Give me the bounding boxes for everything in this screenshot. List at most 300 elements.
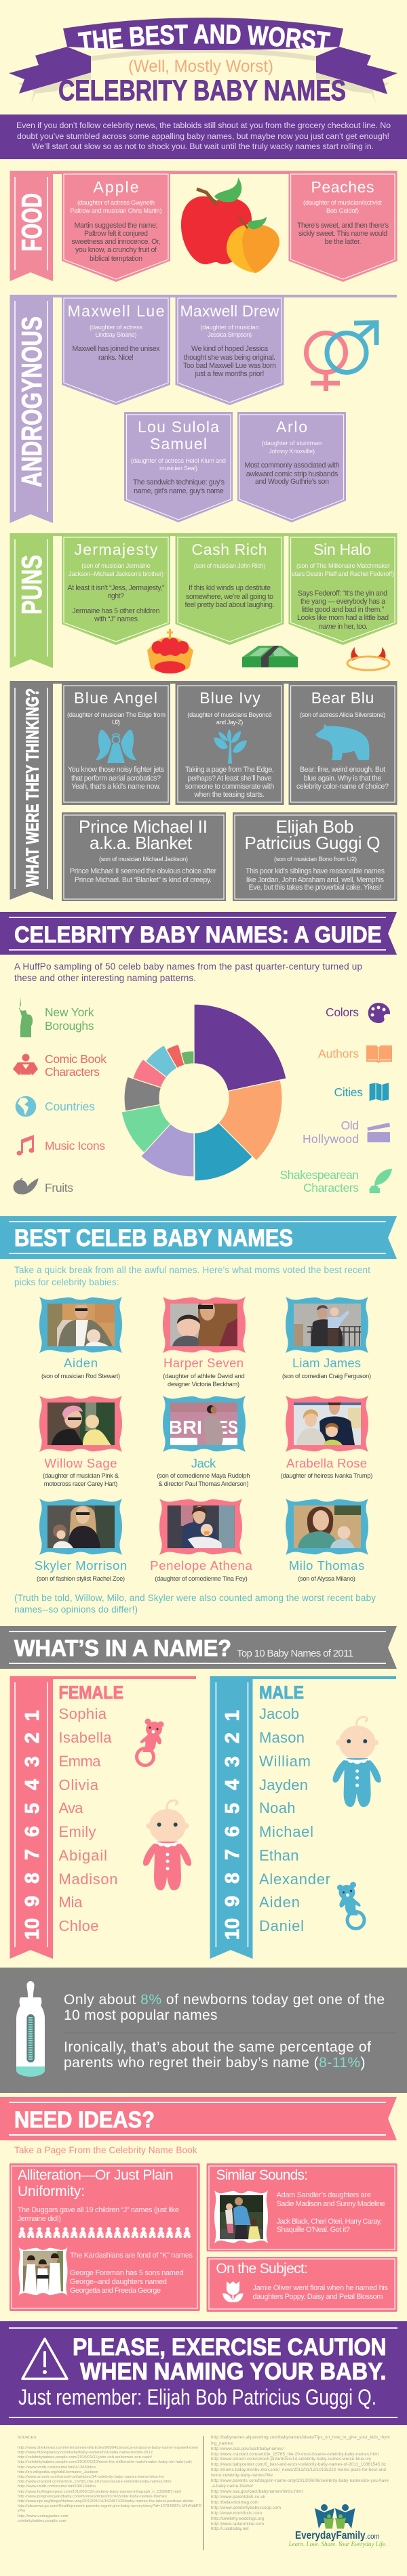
card: Blue Ivy: Blue Ivy (199, 689, 260, 707)
celeb: Skyler Morrison: Skyler Morrison (35, 1558, 127, 1573)
card: Sin Halo: stars Destin Pfaff and Rachel Federoff) (292, 570, 394, 577)
sources right column: http://moms.today.msnbc.msn.com/_news/2012/01/12/10135222-moms-picks-for-best-and- (211, 2468, 387, 2472)
icon: apple and peach (181, 178, 279, 273)
card: Apple: Paltrow felt it conjured (84, 230, 148, 238)
legend: Music Icons: Music Icons (45, 1139, 105, 1152)
list: male names: Daniel (259, 1917, 304, 1934)
top bar (9, 171, 397, 174)
ribbon: food: FOOD (16, 193, 47, 251)
sources right column: http://www.parentdish.co.uk (211, 2495, 266, 2499)
celeb: Arabella Rose: Arabella Rose (286, 1456, 367, 1470)
card: Blue Angel (62, 681, 170, 805)
card: Elijah Bob Patricius Guggi Q: This poor kid’s siblings have reasonable names (246, 867, 385, 875)
banner: celebrity baby names guide (0, 912, 397, 955)
card: Cash Rich: Cash Rich (191, 541, 267, 558)
card: alliteration: The Duggars gave all 19 children “J” names (just like (18, 2206, 179, 2214)
card: Maxwell Drew: Jessica Simpson) (208, 331, 252, 338)
card: Sin Halo: (son of The Millionaire Matchmaker (296, 562, 390, 569)
logo wordmark: EverydayFamily.com (295, 2530, 380, 2541)
card: Bear Blu: Bear Blu (311, 689, 374, 707)
card: Cash Rich: (son of musician John Rich) (194, 562, 265, 569)
card: Blue Angel: Yeah, that’s a kid’s name now. (71, 783, 161, 791)
card: alliteration: Uniformity: (18, 2184, 85, 2199)
card: Cash Rich (175, 533, 284, 645)
icon: tulip (222, 2281, 244, 2302)
icon: gender symbols (307, 323, 376, 391)
legend: Old Hollywood: Old (341, 1119, 359, 1132)
stat: eight percent: Only about 8% of newborns today get one of the (64, 1992, 385, 2008)
card: similar sounds (207, 2163, 398, 2251)
ribbon: puns: PUNS (16, 555, 47, 615)
top bar (210, 1676, 396, 1679)
intro band: Even if you don’t follow celebrity news, the tabloids still shout at you from the grocery checkout line. No (16, 121, 391, 130)
card: Jermajesty: Jermajesty (75, 541, 158, 558)
card: Sin Halo: the yang — everybody has a (301, 598, 385, 606)
ribbon with ranks: 10 (22, 1918, 43, 1940)
list: female names: Abigail (58, 1847, 107, 1864)
icon: blue teddy (337, 1882, 364, 1928)
sources right column: ing_names/ (211, 2441, 233, 2446)
celeb: Penelope Athena: Penelope Athena (150, 1558, 252, 1573)
best names footnote: names--so opinions do differ!) (14, 1604, 138, 1615)
list: female names: Emily (58, 1823, 96, 1840)
sources left column: http://abcnews.go.com/Health/percent-parents-regret-give-baby-survey/story?id=14784897#.UIlhRdbPD (18, 2504, 201, 2508)
list: female names: Mia (58, 1894, 83, 1911)
panel: male names (210, 1676, 396, 1959)
list: male names: Alexander (259, 1871, 330, 1888)
ribbon: food (9, 171, 53, 281)
card: Arlo: Johnny Knoxville) (269, 448, 315, 455)
ribbon with ranks: 9 (22, 1896, 43, 1907)
legend: New York Boroughs: New York (45, 1005, 94, 1019)
ribbon main (63, 18, 343, 50)
card: Lou Sulola Samuel: (daughter of actress Heidi Klum and (131, 457, 226, 464)
legend: Shakespearean Characters (279, 1168, 392, 1194)
card: similar sounds: Adam Sandler’s daughters are (277, 2191, 371, 2199)
card: Elijah Bob Patricius Guggi Q: (son of musician Bono from U2) (274, 856, 357, 863)
card: Blue Ivy: perhaps? At least she’ll have (187, 774, 272, 783)
legend: Old Hollywood (303, 1119, 390, 1146)
logo: EverydayFamily (288, 2504, 387, 2548)
card: Jermajesty: right? (108, 592, 124, 600)
card: Prince Michael II: a.k.a. Blanket (90, 833, 193, 853)
card: Jermajesty (62, 533, 170, 645)
card: Lou Sulola Samuel (124, 412, 233, 522)
ribbon with ranks (210, 1676, 252, 1959)
card: Arlo: Arlo (276, 418, 307, 436)
celeb: Milo Thomas: Milo Thomas (289, 1558, 364, 1573)
card: similar sounds: Sadie Madison and Sunny Madeline (277, 2200, 385, 2208)
celeb: Arabella Rose: (daughter of heiress Ivanka Trump) (281, 1472, 372, 1479)
sources left column: http://www.pregnancyandbaby.com/moms/articles/937665/star-baby-names-themes (18, 2495, 167, 2499)
heading: male: MALE (259, 1682, 304, 1703)
list: female names: Olivia (58, 1777, 99, 1793)
card: Peaches: sickly sweet. This name would (298, 230, 387, 238)
guide intro (14, 961, 362, 983)
icon: ivy plant (214, 729, 247, 764)
sources left column: http://www.sheknows.com/entertainment/articles/969041/jessica-simpsons-baby-name-maxwell-drew (18, 2446, 199, 2450)
banner: best celeb baby names: BEST CELEB BABY NAMES (14, 1225, 293, 1251)
card: Blue Angel: that perform aerial acrobatics? (71, 774, 161, 783)
legend: New York Boroughs: Boroughs (45, 1019, 94, 1033)
ribbon with ranks: 7 (22, 1849, 43, 1860)
card: Elijah Bob Patricius Guggi Q (233, 812, 398, 901)
ribbon with ranks: 9 (222, 1896, 244, 1907)
card: Jermajesty: Jermaine has 5 other children (72, 607, 160, 615)
card: Arlo: and Woody Guthrie’s son (255, 478, 329, 486)
list: female names: Ava (58, 1800, 83, 1816)
banner: need ideas (0, 2097, 397, 2140)
sources left column: http://celebritybabies.people.com/2010/01/20/meet-the-millionaire-matchmaker-baby-sin-halo-judy (18, 2460, 192, 2464)
heading: female: FEMALE (58, 1682, 123, 1703)
best names footnote: (Truth be told, Willow, Milo, and Skyler were also counted among the worst recent baby (14, 1593, 376, 1603)
card: on the subject: On the Subject: (216, 2261, 308, 2277)
card: Bear Blu: blue again. Why is that the (304, 774, 381, 783)
sources right column: http://www.cracked.com/article_15765_the-20-most-bizarre-celebrity-baby-names.html (211, 2452, 379, 2457)
list: female names: Isabella (58, 1729, 112, 1746)
sources right column: http://www.momfinds.com (211, 2511, 262, 2516)
sources right column: http://babynames.allparenting.com/babynames/ideas/Tips_on_how_to_give_your_kids_rhym (211, 2435, 390, 2440)
ribbon with ranks: 1 (22, 1710, 43, 1721)
caution heading: PLEASE, EXERCISE CAUTION (73, 2334, 387, 2361)
legend: Fruits: Fruits (45, 1181, 73, 1194)
legend: Shakespearean Characters: Shakespearean (279, 1168, 359, 1182)
card: Apple: Apple (94, 178, 138, 196)
sources left column: SOURCES: (18, 2436, 37, 2440)
card: Blue Ivy: (daughter of musicians Beyoncé (187, 711, 272, 718)
card: Cash Rich: somewhere, we’re all going to (186, 593, 273, 601)
card: Maxwell Drew (175, 295, 284, 405)
stat: regret: parents who regret their baby’s name (8-11%) (64, 2055, 365, 2071)
legend: Colors: Colors (326, 1005, 359, 1019)
best names intro: Take a quick break from all the awful names. Here’s what moms voted the best recent (14, 1265, 370, 1275)
sources right column: http://www.parents.com/blogs/in-name-only/2012/06/06/celebrity-baby-names/do-you-have (211, 2478, 389, 2483)
sources right column: http://belasnickmag.com (211, 2500, 258, 2505)
panel: caution footer (0, 2321, 407, 2425)
donut chart (121, 1004, 286, 1181)
list: male names: William (259, 1753, 311, 1770)
ribbon: what were they thinking (9, 681, 53, 900)
card: alliteration: Alliteration—Or Just Plain (18, 2167, 174, 2183)
icon: baby boy (333, 1717, 381, 1807)
sources left column: http://en.wikipedia.org/wiki/Jermaine_Jackson (18, 2470, 98, 2474)
card: Prince Michael II: Prince Michael. But “Blanket” is kind of creepy. (75, 876, 212, 884)
ribbon: what were they thinking: WHAT WERE THEY THINKING? (22, 688, 42, 887)
ribbon with ranks: 3 (222, 1756, 244, 1767)
ribbon: puns (9, 533, 53, 668)
celeb: Willow Sage (39, 1396, 122, 1487)
sources divider (203, 2436, 204, 2550)
celeb: Milo Thomas (286, 1499, 368, 1582)
card: Maxwell Lue: Lindsay Sloane) (95, 331, 137, 338)
ribbon with ranks: 6 (22, 1826, 43, 1837)
card: Maxwell Lue: Maxwell has joined the unisex (72, 345, 160, 353)
card: Jermajesty: with “J” names (94, 615, 138, 623)
legend: Comic Book Characters: Characters (45, 1065, 100, 1079)
logo figures (315, 2504, 355, 2529)
sources left column: yPw (18, 2509, 26, 2513)
list: male names: Aiden (259, 1894, 300, 1911)
sources left column: http://www.cracked.com/article_15765_the-20-most-bizarre-celebrity-baby-names.html (18, 2480, 172, 2484)
sources right column: worst-celebrity-baby-names?lite (210, 2473, 273, 2478)
sources left column: http://celebritybabies.people.com/2010/01/11/john-rich-welcomes-son-cash/ (18, 2455, 152, 2459)
legend: Cities: Cities (334, 1085, 363, 1099)
card: Maxwell Drew: Maxwell Drew (180, 302, 279, 320)
sources left column: celebritybabies.people.com (18, 2519, 66, 2523)
card: Sin Halo (289, 533, 398, 645)
top bar (9, 681, 397, 684)
celeb: Liam James: (son of comedian Craig Ferguson) (282, 1373, 371, 1379)
list: male names: Michael (259, 1823, 313, 1840)
best names intro (14, 1265, 370, 1287)
ribbon with ranks: 4 (22, 1779, 43, 1790)
card: alliteration: George Foreman has 5 sons named (70, 2269, 184, 2277)
card: Blue Ivy (175, 681, 284, 805)
sources right column: http://celebrity.weddings.org (211, 2516, 265, 2521)
card: Maxwell Lue: ranks. Nice! (98, 354, 134, 362)
sources left column: http://www.smosh.com/smosh-pit/articles/14-celebrity-baby-names-worse-blue-ivy (18, 2475, 164, 2479)
sources right column: http://www.radaronline.com (211, 2522, 264, 2527)
panel: puns (9, 533, 398, 673)
celeb: Skyler Morrison: (son of fashion stylist Rachel Zoe) (37, 1575, 125, 1582)
ribbon with ranks: 2 (222, 1732, 244, 1743)
icon: angel (96, 730, 136, 763)
celeb: Skyler Morrison (35, 1499, 127, 1582)
card: Prince Michael II: Prince Michael II (79, 816, 208, 837)
card: Peaches: Bob Geldof) (326, 207, 359, 214)
legend: Countries: Countries (45, 1100, 95, 1113)
ribbon shadow (18, 47, 389, 104)
card: Apple: biblical temptation (90, 255, 142, 263)
intro band: We’ll start out slow so as not to shock you. But wait until the truly wacky names start rolling in. (32, 142, 374, 151)
legend: Authors (318, 1045, 392, 1063)
legend: Comic Book Characters: Comic Book (45, 1052, 106, 1066)
celeb: Jack (157, 1396, 250, 1487)
card: Maxwell Drew: just a few months prior! (194, 370, 265, 378)
card: Bear Blu: Bear: fine, weird enough. But (300, 766, 385, 774)
card: Apple: Paltrow and musician Chris Martin) (71, 207, 161, 214)
banner: need ideas: NEED IDEAS? (14, 2107, 155, 2133)
card: Sin Halo: name in her, too. (319, 623, 368, 631)
top bar (9, 295, 397, 297)
card: Arlo (237, 412, 346, 522)
card: Blue Ivy: when the teasing starts. (193, 791, 265, 799)
subtitle: (Well, Mostly Worst) (128, 57, 273, 76)
list: female names: Sophia (58, 1705, 107, 1722)
banner: what's in a name: WHAT’S IN A NAME? (14, 1636, 231, 1661)
icon: pink teddy (137, 1718, 164, 1766)
best names intro: picks for celebrity babies: (14, 1277, 119, 1287)
card: Peaches: be the latter. (324, 238, 361, 246)
card: Maxwell Drew: Too bad Maxwell Lue was born (183, 362, 276, 370)
card: Blue Angel: U2) (112, 719, 120, 726)
celeb: Jack: (son of comedienne Maya Rudolph (157, 1472, 250, 1479)
celeb: Jack: BRI (168, 1417, 202, 1438)
list: male names: Noah (259, 1800, 296, 1816)
title banner (9, 18, 398, 107)
sources left column (18, 2436, 201, 2523)
celeb: Penelope Athena (150, 1499, 252, 1582)
card: Elijah Bob Patricius Guggi Q: Eve, but this takes the proverbial cake. Yikes! (248, 884, 381, 892)
ribbon with ranks: 1 (222, 1710, 244, 1721)
sources right column: http://www.babycenter.com/0_best-and-worst-celebrity-baby-names-of-2011_10361545.bc (211, 2462, 386, 2467)
celeb: Willow Sage: motocross racer Carey Hart) (44, 1480, 117, 1487)
card: Blue Ivy: Taking a page from The Edge, (185, 766, 274, 774)
card: Peaches: (daughter of musician/activist (303, 199, 382, 206)
panel: food (9, 171, 398, 282)
legend: Cities (334, 1083, 389, 1101)
banner: best celeb baby names (0, 1216, 397, 1259)
celeb: Aiden: Aiden (64, 1356, 98, 1370)
caution heading: WHEN NAMING YOUR BABY. (80, 2359, 387, 2385)
panel: female names (9, 1676, 196, 1959)
sources right column (210, 2435, 390, 2531)
ribbon with ranks: 8 (22, 1873, 43, 1884)
stat: eight percent: 10 most popular names (64, 2008, 217, 2023)
card: Apple: you know, a crunchy fruit of (75, 246, 157, 254)
celeb: Harper Seven: Harper Seven (163, 1356, 244, 1370)
card: Blue Ivy: and Jay-Z) (216, 719, 243, 726)
legend: New York Boroughs (19, 997, 94, 1037)
card: Lou Sulola Samuel: Samuel (150, 435, 207, 453)
card: Sin Halo: Sin Halo (313, 541, 371, 558)
panel: androgynous (9, 295, 397, 523)
panel: newborn statistics (0, 1968, 407, 2093)
card: Bear Blu: (son of actress Alicia Silverstone) (300, 711, 385, 718)
card: Maxwell Lue: Maxwell Lue (68, 302, 164, 320)
ribbon with ranks (9, 1676, 53, 1959)
list: male names: Ethan (259, 1847, 298, 1864)
card: similar sounds: Jack Black, Cheri Oteri, Harry Caray, (277, 2218, 382, 2226)
list: male names (259, 1705, 330, 1934)
legend: Shakespearean Characters: Characters (303, 1181, 359, 1194)
top bar (9, 533, 397, 536)
card: Prince Michael II: (son of musician Michael Jackson) (99, 856, 188, 863)
intro band: doubt you’ve stumbled across some appalling baby names, but maybe now you just can’t get enough! (17, 131, 389, 141)
sources right column: http://www.ssa.gov/oact/babynames/limits.html (211, 2489, 303, 2494)
ribbon with ranks: 3 (22, 1756, 43, 1767)
celeb: Harper Seven (163, 1297, 246, 1388)
sources left column: http://www.usmagazine.com (18, 2514, 69, 2518)
banner: what's in a name (0, 1626, 397, 1669)
card: Apple: sweetness and innocence. Or, (72, 238, 160, 246)
card: alliteration (9, 2163, 200, 2311)
legend: Authors: Authors (318, 1047, 359, 1060)
legend: Fruits (14, 1178, 73, 1194)
sources right column: http://www.ssa.gov/oact/babynames/ (211, 2447, 284, 2451)
icon: warning triangle (22, 2339, 67, 2379)
card: Apple: (daughter of actress Gwyneth (77, 199, 155, 206)
list: female names (58, 1705, 118, 1934)
legend: Colors (326, 1003, 390, 1023)
card: Blue Angel: (daughter of musician The Edge from (67, 711, 166, 718)
icon row: nineteen children (18, 2227, 191, 2238)
sources left column: http://www.npr.org/blogs/thetwo-way/2012/05/14/152487425/baby-names-the-latest-partisan-divide (18, 2499, 193, 2504)
intro band (0, 115, 407, 159)
sources left column: http://www.imdb.com/name/nm0086104/bio (18, 2485, 96, 2489)
sources left column: http://www.imdb.com/name/nm0413659/bio (18, 2466, 96, 2470)
celeb: Milo Thomas: (son of Alyssa Milano) (298, 1575, 355, 1582)
card: Blue Angel: Blue Angel (74, 689, 157, 707)
card: similar sounds: Shaquille O’Neal. Got it? (277, 2226, 350, 2234)
celeb: Harper Seven: designer Victoria Beckham) (168, 1381, 239, 1388)
card: Arlo: awkward comic strip husbands (246, 470, 338, 478)
banner: celebrity baby names guide: CELEBRITY BABY NAMES: A GUIDE (14, 922, 381, 948)
icon: baby bottle (16, 1981, 45, 2077)
stat: regret (64, 2039, 371, 2071)
card: Elijah Bob Patricius Guggi Q: like Jordan, John Abraham and, well, Memphis (246, 876, 384, 884)
celeb: Penelope Athena: (daughter of comedienne Tina Fey) (155, 1575, 248, 1582)
sources left column: http://www.fitpregnancy.com/baby/baby-names/hot-baby-name-trends-2012 (18, 2451, 153, 2455)
celeb: Willow Sage: (daughter of musician Pink & (43, 1472, 119, 1479)
celeb: Liam James (282, 1297, 371, 1379)
card: alliteration: Georgetta and Freeda George (70, 2287, 161, 2295)
card: Lou Sulola Samuel: Lou Sulola (138, 418, 219, 436)
card: Maxwell Drew: (daughter of musician (201, 324, 259, 331)
card: Maxwell Lue (62, 295, 170, 405)
list: female names: Emma (58, 1753, 101, 1770)
sources right column: http://www.celebritybabyscoop.com (211, 2506, 281, 2510)
icon: crown (147, 629, 193, 673)
ribbon with ranks: 2 (22, 1732, 43, 1743)
celeb: Aiden (39, 1297, 122, 1379)
photo: Kardashians (19, 2247, 67, 2295)
celeb: Jack: Jack (191, 1456, 216, 1470)
card: Bear Blu: celebrity color-name of choice? (296, 783, 389, 791)
sources right column: -a-baby-name-theme/ (211, 2484, 253, 2489)
sources left column: http://www.huffingtonpost.com/2012/03/13/celebrity-baby-names-infograph_n_1339687.html (18, 2490, 181, 2494)
sources right column: http://i.usatoday.net (211, 2527, 249, 2531)
card: Apple (62, 171, 170, 282)
legend: Countries (16, 1096, 95, 1117)
ribbon with ranks: 6 (222, 1826, 244, 1837)
legend: Comic Book Characters (13, 1052, 106, 1079)
card: alliteration: Jermaine did!) (18, 2215, 61, 2223)
card: Peaches (289, 171, 398, 282)
best names footnote (14, 1593, 376, 1615)
card: Cash Rich: feel pretty bad about laughing. (185, 601, 274, 609)
celeb: Harper Seven: (daughter of athlete David and (163, 1373, 245, 1379)
card: Jermajesty: (son of musician Jermaine (81, 562, 151, 569)
logo tagline: Learn. Love. Share. Your Everyday Life. (288, 2541, 387, 2548)
card: Arlo: (daughter of stuntman (262, 440, 322, 446)
guide intro: A HuffPo sampling of 50 celeb baby names from the past quarter-century turned up (14, 961, 362, 972)
card: Cash Rich: If this kid winds up destitute (189, 584, 271, 592)
panel: what were they thinking (9, 681, 398, 901)
card: Peaches: There’s sweet, and then there’s (297, 222, 389, 230)
card: Prince Michael II: Prince Michael II seemed the obvious choice after (70, 867, 216, 875)
card: Bear Blu (289, 681, 398, 805)
ribbon right tail (316, 47, 398, 94)
card: Sin Halo: Looks like mom had a little bad (297, 614, 389, 622)
card: on the subject (207, 2257, 398, 2312)
celeb: Aiden: (son of musician Rod Stewart) (41, 1373, 120, 1379)
ribbon: androgynous: ANDROGYNOUS (16, 316, 47, 487)
list: female names: Chloe (58, 1917, 99, 1934)
card: Prince Michael II (62, 812, 226, 901)
ribbon with ranks: 7 (222, 1849, 244, 1860)
card: Apple: Martin suggested the name; (75, 222, 157, 230)
ribbon with ranks: 8 (222, 1873, 244, 1884)
card: Arlo: Most commonly associated with (244, 461, 340, 470)
list: male names: Jayden (259, 1777, 308, 1793)
card: Lou Sulola Samuel: name, girl’s name, guy’s name (134, 487, 224, 495)
celeb: Liam James: Liam James (292, 1356, 361, 1370)
card: Peaches: Peaches (311, 178, 374, 196)
stat: eight percent (64, 1992, 385, 2023)
card: similar sounds: Similar Sounds: (216, 2167, 308, 2183)
card: Jermajesty: At least it isn’t “Jess, Jermajesty,” (68, 584, 165, 592)
